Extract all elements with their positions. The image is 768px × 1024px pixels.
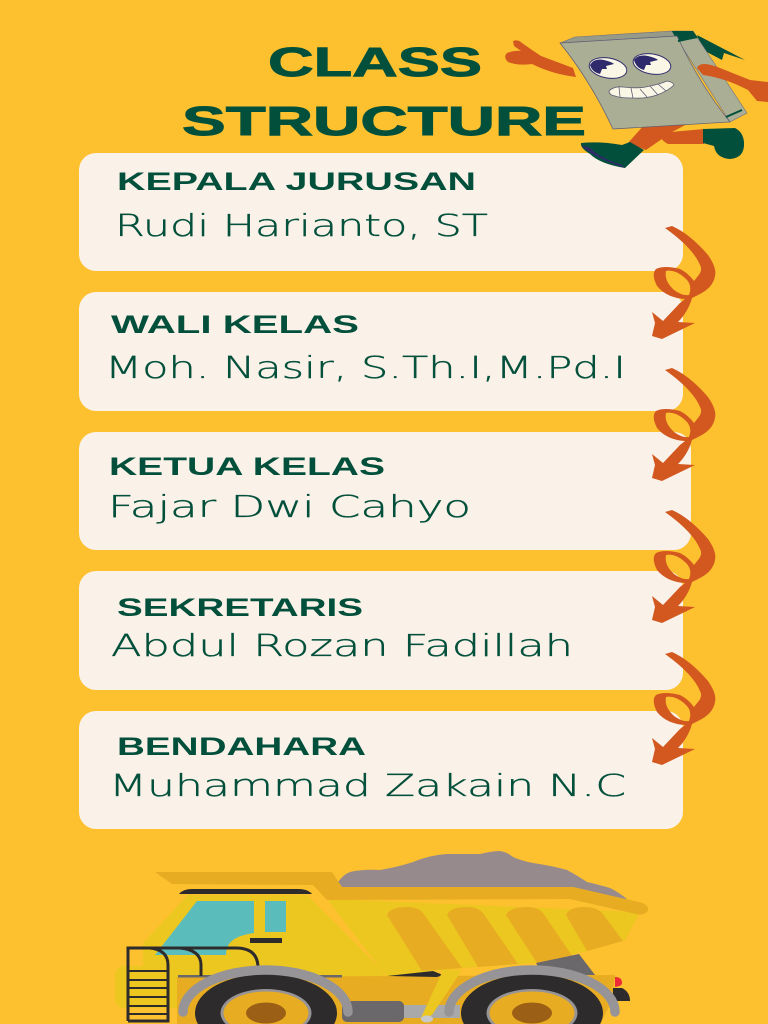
dump ribs [387,907,462,971]
panel: sekretaris [79,571,683,690]
cab [143,895,385,977]
front leg [628,122,691,150]
spine [672,31,747,122]
mouth [609,81,674,98]
panel: bendahara: Muhammad Zakain N.C [109,769,626,804]
panel: wali kelas: Moh. Nasir, S.Th.I,M.Pd.I [105,351,626,386]
left arm and hand [505,40,576,77]
title [182,39,586,144]
back leg [660,129,704,144]
page block [560,31,677,43]
panel: kepala jurusan: Rudi Harianto, ST [115,209,488,244]
rear wheel [449,970,615,1024]
fuel tank and axle [404,1005,460,1018]
right arm [697,64,768,102]
grey wedge [536,954,595,975]
panel: kepala jurusan: KEPALA JURUSAN [117,168,476,196]
black strip [387,971,443,977]
front shoe [581,142,644,168]
icon: running book mascot [505,31,768,168]
panel: kepala jurusan [79,153,683,271]
panel: ketua kelas: KETUA KELAS [109,453,385,481]
arrow 2 [652,368,715,481]
bookmark [697,35,745,60]
panel: wali kelas [79,292,683,411]
cab roof [179,889,312,894]
panel: bendahara [79,711,683,829]
chassis [177,975,615,1024]
yellow strut [420,970,462,1020]
panel: wali kelas: WALI KELAS [111,311,359,339]
eyes [588,55,628,81]
panel: sekretaris: Abdul Rozan Fadillah [111,629,573,664]
back shoe [703,128,744,159]
book cover [560,36,730,129]
panel: ketua kelas: Fajar Dwi Cahyo [108,490,471,525]
arrow 1 [652,226,715,339]
front wheel [183,970,348,1024]
dump rim and canopy [155,872,648,915]
windows [155,901,254,955]
dump body [327,899,640,977]
ladder and handrails [128,948,258,1021]
spine bands [678,37,742,117]
front bumper [115,966,185,1008]
panel: ketua kelas [79,432,691,550]
platform rail [178,975,342,978]
panel: sekretaris: SEKRETARIS [117,594,363,622]
dump truck [115,851,648,1024]
title: STRUCTURE [182,98,586,144]
rock load [338,851,628,900]
panel: bendahara: BENDAHARA [117,733,366,761]
arrow 3 [652,510,715,623]
arrow 4 [652,652,715,765]
title: CLASS [268,39,482,85]
tail lights [615,977,622,987]
spine cap [672,31,698,41]
